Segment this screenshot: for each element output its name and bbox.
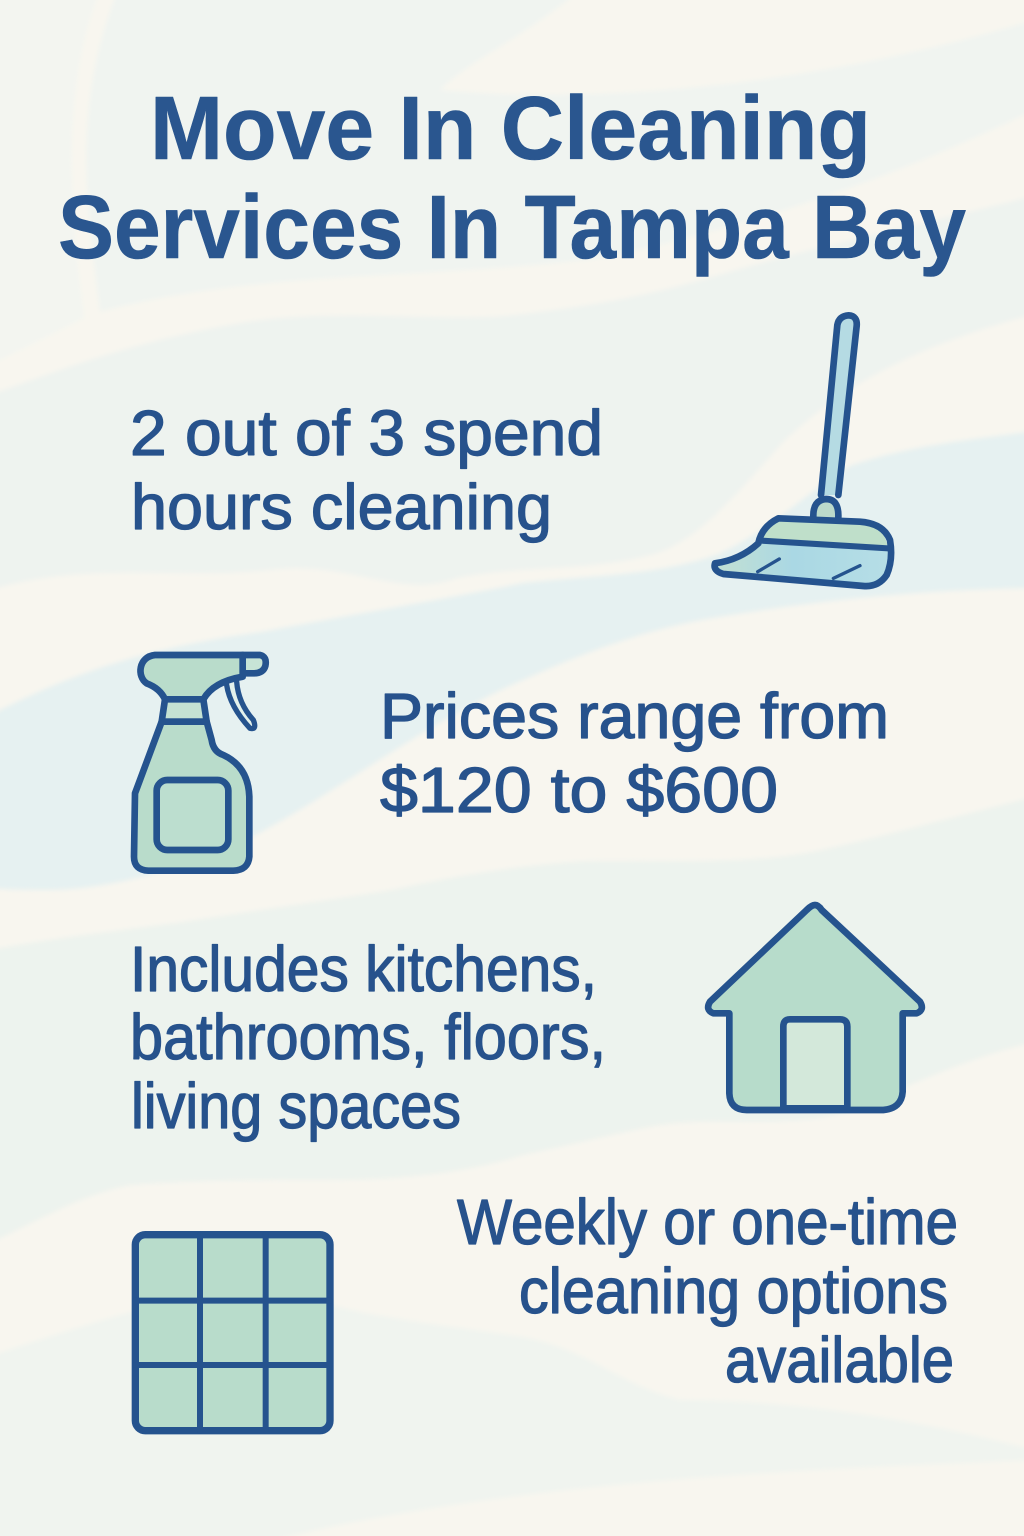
- text: weekly or one-time cleaning options available: available: [725, 1324, 954, 1396]
- icon: tile grid: [135, 1235, 330, 1431]
- icon: mop: [715, 315, 891, 586]
- text: 2 out of 3 spend hours cleaning: hours cleaning: [131, 471, 552, 543]
- text: includes kitchens, bathrooms, floors, living spaces: bathrooms, floors,: [130, 1001, 606, 1073]
- title: Move In Cleaning: [150, 79, 871, 179]
- icon: spray bottle: [134, 655, 266, 871]
- title: Services In Tampa Bay: [58, 178, 966, 278]
- text: prices range from $120 to $600: $120 to $600: [380, 754, 778, 826]
- text: 2 out of 3 spend hours cleaning: 2 out of 3 spend: [130, 397, 603, 469]
- text: includes kitchens, bathrooms, floors, living spaces: [130, 933, 606, 1142]
- text: weekly or one-time cleaning options available: Weekly or one-time: [457, 1186, 958, 1258]
- text: includes kitchens, bathrooms, floors, living spaces: living spaces: [131, 1070, 461, 1142]
- text: prices range from $120 to $600: Prices range from: [380, 680, 889, 752]
- text: weekly or one-time cleaning options available: [457, 1186, 958, 1396]
- text: 2 out of 3 spend hours cleaning: [130, 397, 603, 543]
- text: prices range from $120 to $600: [380, 680, 889, 826]
- text: includes kitchens, bathrooms, floors, living spaces: Includes kitchens,: [130, 933, 597, 1005]
- title: [58, 79, 966, 278]
- icon: house: [708, 905, 922, 1110]
- text: weekly or one-time cleaning options available: cleaning options: [519, 1255, 948, 1327]
